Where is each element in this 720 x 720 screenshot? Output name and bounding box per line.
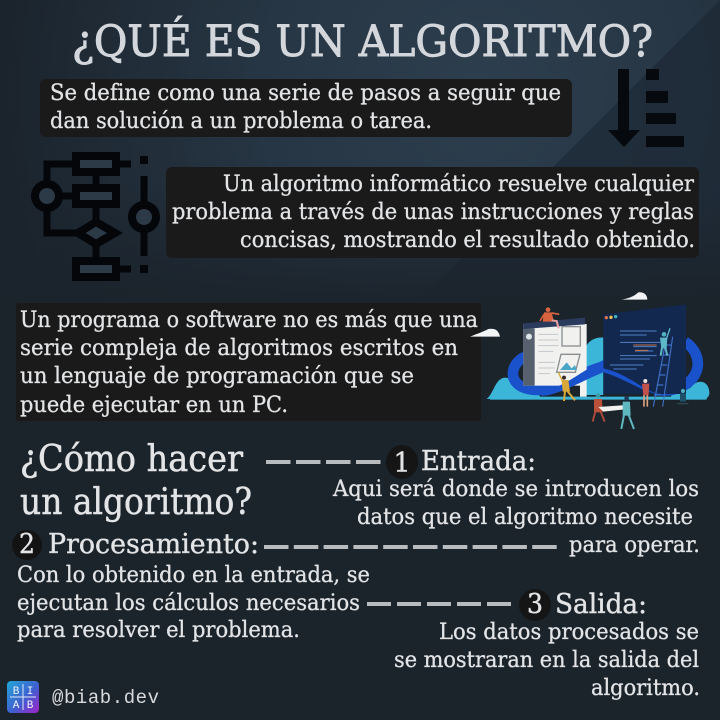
number badge 1: 1	[393, 448, 411, 479]
number badge 2: 2	[19, 529, 35, 560]
number badge 1	[386, 445, 418, 479]
number badge 2	[12, 529, 42, 560]
dashes: step 2 to step 3	[367, 602, 511, 606]
computing algorithm text: Un algoritmo informático resuelve cualquier	[223, 171, 694, 197]
step 3 text: algoritmo.	[591, 675, 700, 701]
computing algorithm text: problema a través de unas instrucciones y reglas	[172, 199, 694, 225]
step 2: procesamiento	[12, 529, 370, 643]
logo: BIAB: A	[13, 700, 20, 712]
clouds	[470, 292, 647, 337]
step 1 text: para operar.	[569, 532, 700, 558]
definition text	[50, 80, 561, 134]
title: ¿QUÉ ES UN ALGORITMO?	[72, 16, 653, 67]
step 1: entrada	[332, 445, 700, 558]
software text: Un programa o software no es más que una	[20, 307, 478, 333]
panel: computing algorithm	[166, 167, 699, 258]
step 2 text: para resolver el problema.	[17, 617, 300, 643]
ladder	[653, 337, 673, 407]
heading: how to make an algorithm	[20, 439, 252, 523]
step 3 text: se mostraran en la salida del	[394, 647, 699, 673]
computing algorithm text	[172, 171, 695, 253]
step 2 heading: Procesamiento:	[48, 529, 259, 560]
logo: BIAB: B	[27, 700, 34, 712]
person on ladder teal	[660, 328, 670, 356]
step 2 text: Con lo obtenido en la entrada, se	[17, 562, 370, 588]
number badge 3	[519, 589, 551, 621]
software text: puede ejecutar en un PC.	[20, 392, 288, 418]
left window	[523, 318, 587, 397]
step 1 heading: Entrada:	[421, 446, 536, 477]
software text: serie compleja de algoritmos escritos en	[20, 335, 458, 361]
step 1 text: Aqui será donde se introducen los	[332, 476, 699, 502]
step 1 text: datos que el algoritmo necesite	[357, 504, 693, 530]
blue infinity ribbon	[513, 342, 698, 390]
step 2 text: ejecutan los cálculos necesarios	[17, 590, 360, 616]
panel: software	[16, 303, 481, 421]
software text: un lenguaje de programación que se	[20, 363, 414, 389]
icon: sort arrow with steps	[608, 69, 684, 147]
person pink	[642, 379, 649, 407]
person reaching up yellow	[558, 372, 575, 401]
person seated right	[677, 389, 688, 404]
step 3 text	[394, 619, 700, 701]
ribbon front	[542, 360, 670, 396]
logo: BIAB	[7, 681, 39, 713]
step 3 text: Los datos procesados se	[439, 619, 699, 645]
heading: how to make an algorithm: un algoritmo?	[20, 482, 252, 523]
dashes: heading to step 1	[266, 460, 381, 464]
handle: @biab.dev	[52, 687, 159, 709]
person sitting top	[540, 307, 559, 328]
heading: how to make an algorithm: ¿Cómo hacer	[20, 439, 244, 480]
logo: BIAB: I	[27, 686, 33, 698]
definition text: dan solución a un problema o tarea.	[50, 108, 432, 134]
step 3 heading: Salida:	[555, 589, 647, 620]
software text	[20, 307, 478, 418]
logo: BIAB: B	[13, 686, 20, 698]
teal clouds	[487, 337, 709, 400]
step 2 text	[17, 562, 370, 643]
icon: flowchart	[35, 156, 156, 277]
right code window	[603, 304, 686, 394]
computing algorithm text: concisas, mostrando el resultado obtenido.	[240, 227, 695, 253]
two people carrying	[593, 393, 634, 429]
illustration: infinity loop with people and screens	[470, 292, 709, 429]
definition text: Se define como una serie de pasos a seguir que	[50, 80, 561, 106]
step 3: salida	[394, 589, 700, 701]
dashes: step 2 to step 1	[264, 545, 559, 549]
step 1 text	[332, 476, 700, 558]
number badge 3: 3	[527, 589, 543, 620]
panel: definition	[40, 79, 572, 137]
